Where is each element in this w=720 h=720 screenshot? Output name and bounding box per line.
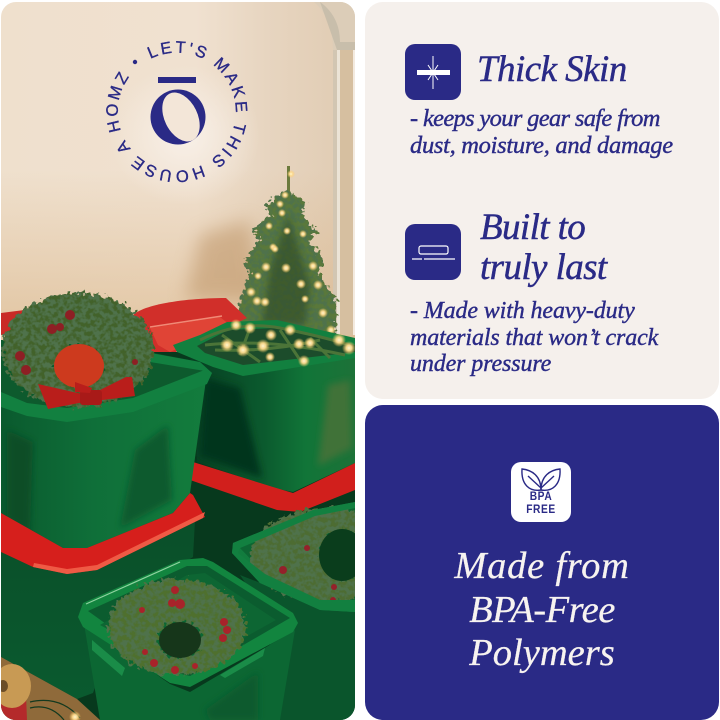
badge label: BPA bbox=[530, 489, 552, 503]
logo ring text: LET'S MAKE THIS HOUSE A HOMZ bbox=[106, 41, 248, 182]
red lid under bin bbox=[190, 462, 355, 512]
logo ring dot bbox=[133, 60, 137, 64]
ribbon spool bbox=[0, 664, 31, 720]
green bin with wreath and bow bbox=[1, 293, 212, 548]
floor bbox=[1, 657, 100, 720]
heading: Made from BPA-Free Polymers: Polymers bbox=[469, 632, 615, 674]
badge label: FREE bbox=[526, 502, 556, 516]
heading: Made from BPA-Free Polymers: Made from bbox=[454, 545, 630, 587]
text: thick skin description: - keeps your gear safe from bbox=[410, 105, 660, 132]
red lid under left bin bbox=[1, 493, 205, 574]
holiday wreath bbox=[2, 293, 154, 407]
wall background bbox=[1, 2, 355, 347]
icon: thick skin bbox=[405, 44, 461, 100]
dark base behind the bins bbox=[1, 352, 355, 720]
small christmas tree bbox=[232, 166, 336, 335]
panel: features bbox=[365, 2, 719, 399]
heading: Built to truly last bbox=[480, 207, 608, 288]
arched window frame bbox=[320, 2, 355, 335]
wreath in right bin bbox=[250, 505, 355, 600]
circular logo bbox=[106, 41, 248, 182]
icon: built to last bbox=[405, 224, 461, 280]
red bow bbox=[38, 377, 135, 409]
heading: Made from BPA-Free Polymers bbox=[454, 545, 630, 674]
back red lid bbox=[1, 298, 247, 357]
badge label bbox=[526, 489, 556, 516]
text: built to last description: - Made with heavy-duty bbox=[410, 298, 635, 324]
heading: Thick Skin: Thick Skin bbox=[477, 49, 627, 90]
text: built to last description: materials that won’t crack bbox=[410, 324, 658, 350]
text: thick skin description bbox=[410, 105, 673, 159]
wreath in front bin bbox=[108, 579, 246, 675]
text: thick skin description: dust, moisture, and damage bbox=[410, 132, 673, 159]
badge leaves bbox=[521, 468, 561, 491]
green bin, front right bbox=[232, 502, 355, 720]
green bin with lights bbox=[173, 319, 356, 492]
logo mark o with macron bbox=[150, 77, 207, 148]
string of lights on floor bbox=[30, 700, 80, 720]
heading: Built to truly last: truly last bbox=[480, 246, 607, 288]
icon: BPA free badge bbox=[511, 462, 571, 522]
panel: product photo bbox=[1, 2, 355, 720]
text: built to last description: under pressure bbox=[410, 351, 551, 377]
heading: Built to truly last: Built to bbox=[480, 207, 585, 248]
heading: Made from BPA-Free Polymers: BPA-Free bbox=[469, 588, 615, 630]
dark bin at left bbox=[1, 520, 195, 699]
text: built to last description bbox=[410, 298, 659, 377]
green bin, front with wreath bbox=[78, 558, 298, 720]
panel: BPA free bbox=[365, 405, 719, 720]
